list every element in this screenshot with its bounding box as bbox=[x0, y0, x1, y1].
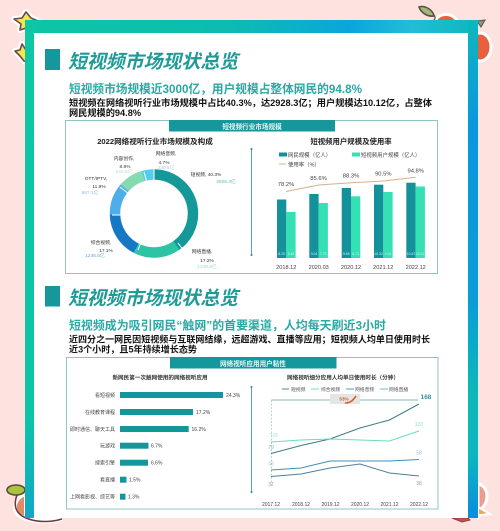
bar chart: 7.73 bbox=[320, 252, 327, 256]
line chart values: 168 bbox=[421, 394, 432, 401]
bar chart title: 短视频用户规模及使用率 bbox=[310, 137, 392, 146]
bar chart: 8.29 bbox=[278, 252, 285, 256]
divider axis bbox=[250, 386, 252, 493]
horizontal bar chart: 玩游戏 bbox=[100, 443, 115, 450]
donut labels: 867.1亿 bbox=[82, 189, 99, 196]
panel: user stickiness bbox=[66, 357, 438, 509]
donut labels: 1246.5亿 bbox=[85, 252, 105, 259]
bar chart x axis: 2022.12 bbox=[406, 265, 426, 271]
donut labels: 11.9% bbox=[92, 184, 106, 190]
callout: growth bbox=[330, 394, 360, 404]
line chart values: 105 bbox=[270, 433, 278, 439]
panel header: 短视频行业市场规模 bbox=[222, 122, 282, 131]
usage rate line: 85.6% bbox=[310, 176, 327, 182]
bar chart: 9.89 bbox=[343, 252, 350, 256]
line chart values: 79 bbox=[268, 445, 274, 451]
horizontal bar chart: 24.3% bbox=[226, 393, 241, 399]
bar chart: 10.32 bbox=[374, 252, 383, 256]
bar chart: 10.67 bbox=[407, 252, 415, 256]
bar chart legend: 短视频用户规模（亿人） bbox=[361, 151, 420, 159]
bar chart: 6.48 bbox=[288, 252, 294, 256]
donut title: 2022网络视听行业市场规模及构成 bbox=[97, 136, 213, 146]
bar chart legend bbox=[279, 151, 420, 168]
horizontal bar chart: 看短视频 bbox=[95, 392, 115, 399]
line chart x axis: 2020.12 bbox=[351, 502, 369, 508]
icon: apple bottom left bbox=[7, 485, 62, 522]
horizontal bar chart: 即时通信、聊天工具 bbox=[70, 426, 115, 433]
bar chart x axis: 2020.03 bbox=[309, 265, 329, 271]
line chart x axis bbox=[262, 502, 428, 508]
horizontal bar chart: 1.5% bbox=[129, 478, 141, 484]
line chart title: 网络视听细分应用人均单日使用时长（分钟） bbox=[287, 374, 399, 382]
horizontal bar chart bbox=[70, 392, 241, 501]
section 2 heading: 短视频市场现状总览 bbox=[68, 288, 241, 310]
bar chart legend: 使用率（%） bbox=[288, 160, 320, 168]
donut labels: 网络直播, bbox=[192, 248, 212, 255]
horizontal bar chart: 16.2% bbox=[192, 427, 206, 433]
horizontal bar chart: 6.6% bbox=[151, 461, 163, 467]
icon: star lower bbox=[15, 44, 30, 62]
donut chart bbox=[99, 158, 209, 269]
divider axis bbox=[250, 148, 252, 256]
line chart legend: 综合视频 bbox=[321, 386, 340, 393]
section 1 body text bbox=[69, 97, 433, 118]
usage rate line: 78.2% bbox=[278, 182, 294, 188]
horizontal bar chart: 上网看影视、综艺等 bbox=[70, 494, 115, 501]
section 1 body text: 短视频在网络视听行业市场规模中占比40.3%，达2928.3亿；用户规模达10.12亿，占整体 bbox=[69, 97, 433, 109]
donut labels: 网络音频, bbox=[156, 150, 176, 157]
bar chart x axis: 2018.12 bbox=[276, 265, 296, 271]
usage rate line bbox=[278, 168, 424, 192]
section 1 heading: 短视频市场现状总览 bbox=[68, 51, 241, 73]
bar chart bbox=[277, 183, 425, 258]
section 2 body text bbox=[69, 334, 430, 354]
line chart legend: 短视频 bbox=[291, 386, 306, 393]
bar chart x axis bbox=[276, 265, 426, 271]
bar chart: 10.12 bbox=[416, 252, 425, 256]
section 2 subheading: 短视频成为吸引网民“触网”的首要渠道，人均每天刷近3小时 bbox=[69, 318, 386, 332]
donut labels: 17.2% bbox=[200, 258, 215, 264]
bar chart: 8.73 bbox=[352, 252, 359, 256]
horizontal bar chart: 在线教育课程 bbox=[85, 409, 115, 416]
donut labels: 综合视频, bbox=[91, 239, 111, 246]
horizontal bar chart: 1.3% bbox=[128, 495, 140, 501]
bar chart: 9.34 bbox=[385, 252, 391, 256]
line chart values: 58 bbox=[416, 450, 422, 456]
usage rate line: 94.8% bbox=[407, 168, 424, 174]
bar chart title: 新网民第一次触网使用的网络视听应用 bbox=[112, 374, 208, 382]
horizontal bar chart: 6.7% bbox=[151, 444, 163, 450]
section 2 body text: 近3个小时，且5年持续增长态势 bbox=[69, 344, 197, 354]
panel: market size bbox=[66, 120, 438, 274]
line chart x axis: 2018.12 bbox=[292, 502, 310, 508]
line chart x axis: 2021.12 bbox=[380, 502, 399, 508]
usage rate line: 90.5% bbox=[375, 172, 392, 178]
line chart values: 120 bbox=[415, 422, 423, 428]
donut labels: 4.7% bbox=[159, 160, 170, 166]
section 1 body text: 网民规模的94.8% bbox=[69, 107, 141, 118]
panel header bbox=[169, 120, 335, 132]
bar chart: 9.04 bbox=[311, 252, 317, 256]
donut labels: 17.1% bbox=[99, 248, 114, 254]
donut labels: OTT/IPTV, bbox=[85, 176, 107, 182]
horizontal bar chart: 17.2% bbox=[196, 410, 211, 416]
line chart legend: 网络音频 bbox=[355, 386, 374, 393]
donut labels: 230.5亿 bbox=[158, 164, 175, 171]
donut labels bbox=[82, 150, 236, 270]
bar chart x axis: 2021.12 bbox=[373, 265, 393, 271]
line chart legend bbox=[282, 386, 408, 393]
bar chart legend: 网民规模（亿人） bbox=[288, 151, 331, 159]
line chart values bbox=[268, 394, 432, 488]
usage rate line: 88.3% bbox=[343, 174, 359, 180]
horizontal bar chart: 搜索引擎 bbox=[95, 460, 115, 467]
section 1 subheading: 短视频市场规模近3000亿，用户规模占整体网民的94.8% bbox=[69, 82, 362, 96]
line chart x axis: 2017.12 bbox=[262, 502, 280, 508]
line chart legend: 网络直播 bbox=[389, 386, 408, 393]
panel header: 网络视听应用用户粘性 bbox=[220, 359, 286, 368]
icon: apple top right bbox=[419, 7, 491, 61]
line chart values: 37 bbox=[268, 482, 274, 488]
callout: growth: 53% bbox=[339, 396, 349, 402]
line chart x axis: 2019.12 bbox=[321, 502, 340, 508]
donut labels: 短视频, 40.3% bbox=[191, 171, 222, 178]
donut labels: 内容创作, bbox=[114, 155, 134, 162]
line chart values: 49 bbox=[268, 462, 274, 468]
donut labels: 644.8亿 bbox=[116, 168, 133, 175]
donut labels: 8.9% bbox=[120, 164, 131, 170]
line chart x axis: 2022.12 bbox=[410, 502, 428, 508]
horizontal bar chart: 看直播 bbox=[100, 477, 115, 484]
line chart bbox=[271, 400, 419, 486]
bar chart x axis: 2020.12 bbox=[341, 265, 361, 271]
donut labels: 2928.3亿 bbox=[216, 178, 236, 185]
line chart values: 38 bbox=[416, 481, 422, 487]
icon: apple and star bottom right bbox=[452, 484, 490, 522]
panel header bbox=[170, 357, 336, 368]
donut labels: 1249.8亿 bbox=[197, 263, 217, 270]
section 2 body text: 近四分之一网民因短视频与互联网结缘，远超游戏、直播等应用；短视频人均单日使用时长 bbox=[69, 334, 430, 346]
icon: star top bbox=[14, 12, 38, 31]
